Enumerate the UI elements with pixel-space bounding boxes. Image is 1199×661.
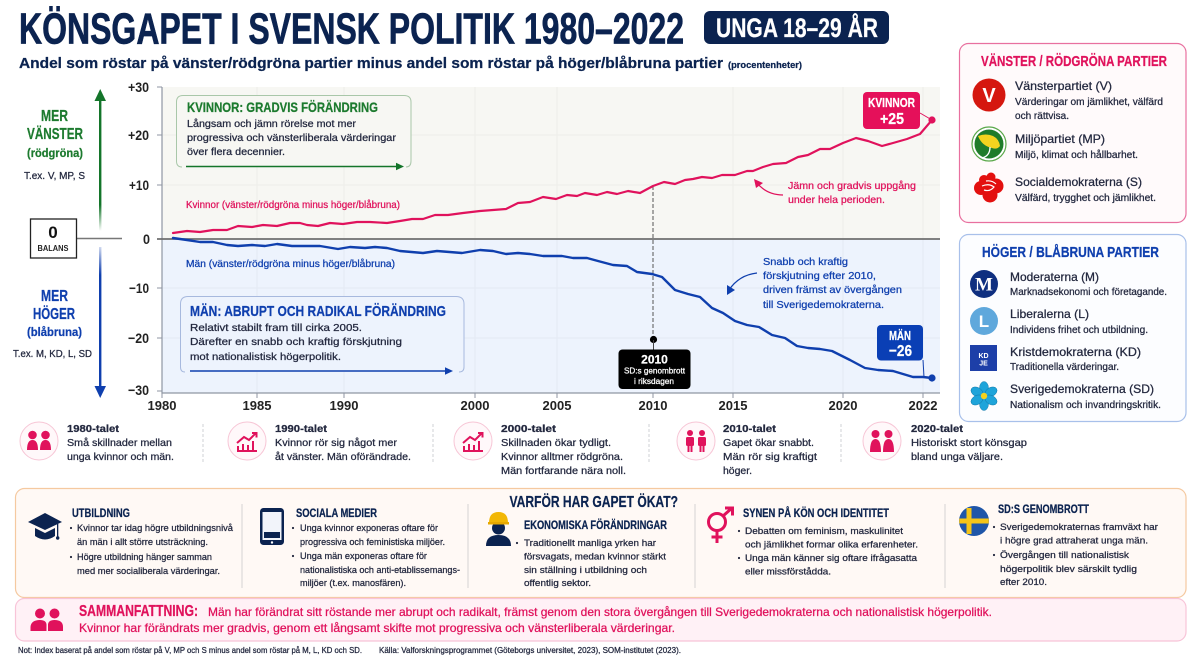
icon: people xyxy=(30,608,63,631)
reason: ekonomiska förändringar: EKONOMISKA FÖRÄNDRINGAR xyxy=(524,519,668,532)
footnote and source: Källa: Valforskningsprogrammet (Göteborgs universitet, 2023), SOM-institutet (2023). xyxy=(379,645,681,655)
decade: 2010-talet: Gapet ökar snabbt. xyxy=(723,437,814,449)
reason: ekonomiska förändringar: Traditionellt manliga yrken har xyxy=(524,538,656,549)
x axis labels: 2005 xyxy=(543,398,571,413)
party: moderaterna xyxy=(970,270,1167,298)
panel heading: VARFÖR HAR GAPET ÖKAT? xyxy=(510,492,678,511)
footnote and source: Not: Index baserat på andel som röstar på V, MP och S minus andel som röstar på M, L, KD och SD. xyxy=(18,645,362,655)
marker label: 2010 sd:s genombrott: i riksdagen xyxy=(634,376,674,386)
x axis labels: 2000 xyxy=(461,398,489,413)
callout: män abrupt och radikal förändring: mot nationalistisk högerpolitik. xyxy=(190,351,341,363)
label: mer vänster xyxy=(24,108,85,182)
panel: sammanfattning: Män har förändrat sitt röstande mer abrupt och radikalt, främst genom den stora övergången till Sverigedemokraterna och nationalistisk högerpolitik. xyxy=(208,605,992,619)
reason: sd:s genombrott: Sverigedemokraternas framväxt har xyxy=(1000,522,1158,533)
reason: sd:s genombrott: Övergången till nationalistisk xyxy=(1000,550,1129,561)
y axis labels: −30 xyxy=(128,382,149,398)
reason: sociala medier: Unga kvinnor exponeras oftare för xyxy=(300,523,438,534)
annotation: snabb förskjutning: driven främst av övergången xyxy=(763,284,902,296)
party: liberalerna: Liberalerna (L) xyxy=(1010,307,1089,321)
annotation: snabb förskjutning: till Sverigedemokraterna. xyxy=(763,299,884,311)
x axis labels: 1980 xyxy=(148,398,176,413)
decade: 2000-talet: Skillnaden ökar tydligt. xyxy=(501,437,611,449)
reason: sociala medier: miljöer (t.ex. manosfären). xyxy=(300,578,406,589)
x axis labels: 2015 xyxy=(719,398,747,413)
annotation: jämn uppgång xyxy=(754,179,916,206)
decade: 2020-talet xyxy=(863,422,1027,463)
decade: 2000-talet: Kvinnor alltmer rödgröna. xyxy=(501,451,623,463)
reason: synen på kön och identitet: och jämlikhet formar olika erfarenheter. xyxy=(745,540,918,550)
marker label: 2010 sd:s genombrott: SD:s genombrott xyxy=(624,366,686,376)
decade: 1990-talet: 1990-talet xyxy=(275,423,328,435)
panel: höger / blåbruna partier xyxy=(960,234,1186,422)
x axis labels: 2022 xyxy=(909,398,937,413)
party: kristdemokraterna: JE xyxy=(979,360,988,368)
panel: sammanfattning: Kvinnor har förändrats mer gradvis, genom ett långsamt skifte mot progressiva och vänsterliberala värderingar. xyxy=(79,621,675,635)
label: mer vänster: MER xyxy=(41,108,68,125)
reason: sd:s genombrott: efter 2010. xyxy=(1000,577,1047,588)
label: mer höger: (blåbruna) xyxy=(27,325,82,339)
y axis labels: +10 xyxy=(129,177,149,193)
y axis labels: −10 xyxy=(129,280,149,296)
left axis legend xyxy=(13,89,122,398)
decade: 2000-talet: Män fortfarande nära noll. xyxy=(501,465,626,477)
party: moderaterna: M xyxy=(975,274,993,296)
reason: sd:s genombrott: SD:S GENOMBROTT xyxy=(998,504,1089,516)
x axis labels: 2020 xyxy=(829,398,857,413)
label: balans xyxy=(30,219,122,258)
decade: 2010-talet: 2010-talet xyxy=(723,423,777,435)
decade: 2020-talet: bland unga väljare. xyxy=(911,451,1003,463)
decade: 2010-talet: höger. xyxy=(723,465,752,477)
decade: 2010-talet: Män rör sig kraftigt xyxy=(723,451,817,463)
decade: 2000-talet: 2000-talet xyxy=(501,423,557,435)
label: mer vänster: (rödgröna) xyxy=(27,146,83,160)
label: mer höger: T.ex. M, KD, L, SD xyxy=(13,349,92,360)
panel: vänster / rödgröna partier xyxy=(960,44,1186,222)
arrow: mer höger xyxy=(94,247,106,398)
line: kvinnor xyxy=(173,120,932,233)
label: mer vänster: VÄNSTER xyxy=(27,126,83,143)
party: socialdemokraterna: Socialdemokraterna (S) xyxy=(1015,175,1142,189)
footnote and source xyxy=(18,645,681,655)
annotation: snabb förskjutning: förskjutning efter 2010, xyxy=(763,270,876,282)
panel: sammanfattning: SAMMANFATTNING: xyxy=(79,603,198,620)
party: kristdemokraterna: KD xyxy=(978,353,989,360)
callout: män abrupt och radikal förändring: MÄN: ABRUPT OCH RADIKAL FÖRÄNDRING xyxy=(190,303,446,320)
annotation: snabb förskjutning xyxy=(727,256,902,311)
decade: 2020-talet: Historiskt stort könsgap xyxy=(911,437,1027,449)
label: mer höger: HÖGER xyxy=(33,306,75,323)
y axis labels xyxy=(128,79,150,398)
callout: kvinnor gradvis förändring: progressiva och vänsterliberala värderingar xyxy=(187,132,397,144)
reason: sd:s genombrott: högerpolitik blev särskilt tydlig xyxy=(1000,564,1137,575)
y axis labels: +20 xyxy=(128,127,149,143)
subtitle: (procentenheter) xyxy=(728,60,802,70)
decade: 1980-talet: unga kvinnor och män. xyxy=(67,451,174,463)
panel: sammanfattning xyxy=(16,598,1186,641)
subtitle: Andel som röstar på vänster/rödgröna partier minus andel som röstar på höger/blåbruna partier xyxy=(19,56,723,72)
reason: utbildning: än män i allt större utsträckning. xyxy=(77,537,208,548)
party: vänsterpartiet xyxy=(972,78,1163,122)
x axis labels: 1990 xyxy=(330,398,358,413)
callout: kvinnor gradvis förändring: Långsam och jämn rörelse mot mer xyxy=(187,118,357,130)
reason: sociala medier: nationalistiska och anti-etablissemangs- xyxy=(300,565,460,576)
annotation: jämn uppgång: under hela perioden. xyxy=(788,194,885,206)
end label: män −26 xyxy=(877,325,936,382)
end label: kvinnor +25: +25 xyxy=(880,111,904,128)
end label: kvinnor +25 xyxy=(863,92,936,129)
end label: män −26: −26 xyxy=(889,343,912,360)
marker label: 2010 sd:s genombrott: 2010 xyxy=(641,352,668,366)
reason: utbildning: Kvinnor tar idag högre utbildningsnivå xyxy=(77,523,234,534)
reason: synen på kön och identitet xyxy=(708,507,918,578)
reason: sd:s genombrott xyxy=(959,504,1158,588)
y axis labels: −20 xyxy=(128,330,149,346)
annotation: jämn uppgång: Jämn och gradvis uppgång xyxy=(788,180,916,192)
decade: 2020-talet: 2020-talet xyxy=(911,423,964,435)
label: mer höger xyxy=(13,288,92,360)
badge: unga 18–29 år: UNGA 18–29 ÅR xyxy=(716,12,878,43)
label: mer vänster: T.ex. V, MP, S xyxy=(24,171,85,182)
title: KÖNSGAPET I SVENSK POLITIK 1980–2022 xyxy=(19,4,684,54)
icon: swedish flag xyxy=(959,506,989,536)
party: kristdemokraterna xyxy=(970,345,1141,373)
x axis labels: 2010 xyxy=(639,398,667,413)
party: moderaterna: Moderaterna (M) xyxy=(1010,270,1099,284)
decade: 2000-talet xyxy=(454,422,626,477)
party: sverigedemokraterna: Sverigedemokraterna (SD) xyxy=(1010,382,1154,396)
reason: synen på kön och identitet: Unga män känner sig oftare ifrågasatta xyxy=(745,553,918,564)
party: vänsterpartiet: och rättvisa. xyxy=(1015,111,1069,122)
line chart xyxy=(128,79,940,413)
reason: ekonomiska förändringar: offentlig sektor. xyxy=(524,578,591,589)
reason: utbildning: med mer socialiberala värderingar. xyxy=(77,566,220,577)
arrow: mer vänster xyxy=(94,89,106,231)
reason: synen på kön och identitet: eller missförstådda. xyxy=(745,566,831,578)
decade: 1990-talet xyxy=(228,422,411,463)
line: män xyxy=(173,238,932,378)
party: liberalerna: L xyxy=(979,312,989,331)
party: sverigedemokraterna xyxy=(969,382,1161,411)
x axis labels: 1985 xyxy=(243,398,271,413)
icon: graduation cap xyxy=(28,513,62,540)
label: balans: 0 xyxy=(48,223,58,242)
label: mer höger: MER xyxy=(41,288,68,305)
callout: män abrupt och radikal förändring: Relativt stabilt fram till cirka 2005. xyxy=(190,322,362,334)
reason: sociala medier: progressiva och feministiska miljöer. xyxy=(300,537,445,548)
decade timeline xyxy=(20,422,1027,477)
party: miljöpartiet: Miljöpartiet (MP) xyxy=(1015,132,1105,146)
decade: 1980-talet xyxy=(20,422,174,463)
decade: 2010-talet xyxy=(677,422,817,477)
callout: kvinnor gradvis förändring: över flera decennier. xyxy=(187,146,285,158)
reason: ekonomiska förändringar: sin ställning i utbildning och xyxy=(524,565,647,576)
reason: ekonomiska förändringar: försvagats, medan kvinnor stärkt xyxy=(524,552,666,562)
marker line: 2010 xyxy=(652,186,654,339)
decade: 1990-talet: åt vänster. Män oförändrade. xyxy=(275,451,411,463)
y axis labels: +30 xyxy=(128,79,149,95)
marker label: 2010 sd:s genombrott xyxy=(618,336,690,389)
panel heading: HÖGER / BLÅBRUNA PARTIER xyxy=(982,244,1159,261)
reason: sociala medier xyxy=(260,508,460,589)
party: miljöpartiet xyxy=(972,127,1138,161)
callout: kvinnor gradvis förändring xyxy=(176,96,411,170)
decade: 1990-talet: Kvinnor rör sig något mer xyxy=(275,437,398,449)
decade: 1980-talet: 1980-talet xyxy=(67,423,120,435)
y axis labels: 0 xyxy=(143,231,150,247)
annotation: snabb förskjutning: Snabb och kraftig xyxy=(763,256,848,268)
label: balans: BALANS xyxy=(38,243,69,253)
reason: utbildning: Högre utbildning hänger samman xyxy=(77,552,212,563)
party: socialdemokraterna xyxy=(974,172,1156,204)
party: vänsterpartiet: V xyxy=(982,85,996,107)
party: kristdemokraterna: Kristdemokraterna (KD) xyxy=(1010,345,1141,359)
reason: sociala medier: SOCIALA MEDIER xyxy=(296,508,378,520)
party: vänsterpartiet: Värderingar om jämlikhet, välfärd xyxy=(1015,97,1163,108)
end label: kvinnor +25: KVINNOR xyxy=(868,96,915,110)
reason: synen på kön och identitet: SYNEN PÅ KÖN OCH IDENTITET xyxy=(743,507,889,520)
party: liberalerna xyxy=(970,307,1148,336)
reason: utbildning xyxy=(28,508,234,577)
party: moderaterna: Marknadsekonomi och företagande. xyxy=(1010,287,1167,298)
party: kristdemokraterna: Traditionella värderingar. xyxy=(1010,362,1119,373)
party: miljöpartiet: Miljö, klimat och hållbarhet. xyxy=(1015,149,1138,161)
icon: gender symbol xyxy=(708,508,732,543)
party: vänsterpartiet: Vänsterpartiet (V) xyxy=(1015,79,1112,93)
reason: synen på kön och identitet: Debatten om feminism, maskulinitet xyxy=(745,526,903,537)
series label: kvinnor: Kvinnor (vänster/rödgröna minus höger/blåbruna) xyxy=(186,199,400,211)
party: liberalerna: Individens frihet och utbildning. xyxy=(1010,325,1148,336)
reason: sd:s genombrott: i högre grad attraherat unga män. xyxy=(1000,536,1148,546)
party: socialdemokraterna: Välfärd, trygghet och jämlikhet. xyxy=(1015,193,1156,204)
callout: män abrupt och radikal förändring xyxy=(180,296,464,375)
party: sverigedemokraterna: Nationalism och invandringskritik. xyxy=(1010,400,1161,411)
reason: utbildning: UTBILDNING xyxy=(72,508,130,520)
reason: sociala medier: Unga män exponeras oftare för xyxy=(300,551,427,562)
callout: kvinnor gradvis förändring: KVINNOR: GRADVIS FÖRÄNDRING xyxy=(187,99,378,115)
end label: män −26: MÄN xyxy=(889,328,911,343)
icon: smartphone xyxy=(260,508,284,545)
decade: 1980-talet: Små skillnader mellan xyxy=(67,437,172,449)
series label: män: Män (vänster/rödgröna minus höger/blåbruna) xyxy=(186,258,395,270)
panel: varför har gapet ökat xyxy=(16,488,1186,598)
reason: ekonomiska förändringar xyxy=(486,512,668,589)
callout: män abrupt och radikal förändring: Därefter en snabb och kraftig förskjutning xyxy=(190,336,402,348)
x axis labels xyxy=(148,398,937,413)
icon: construction worker xyxy=(486,512,511,546)
